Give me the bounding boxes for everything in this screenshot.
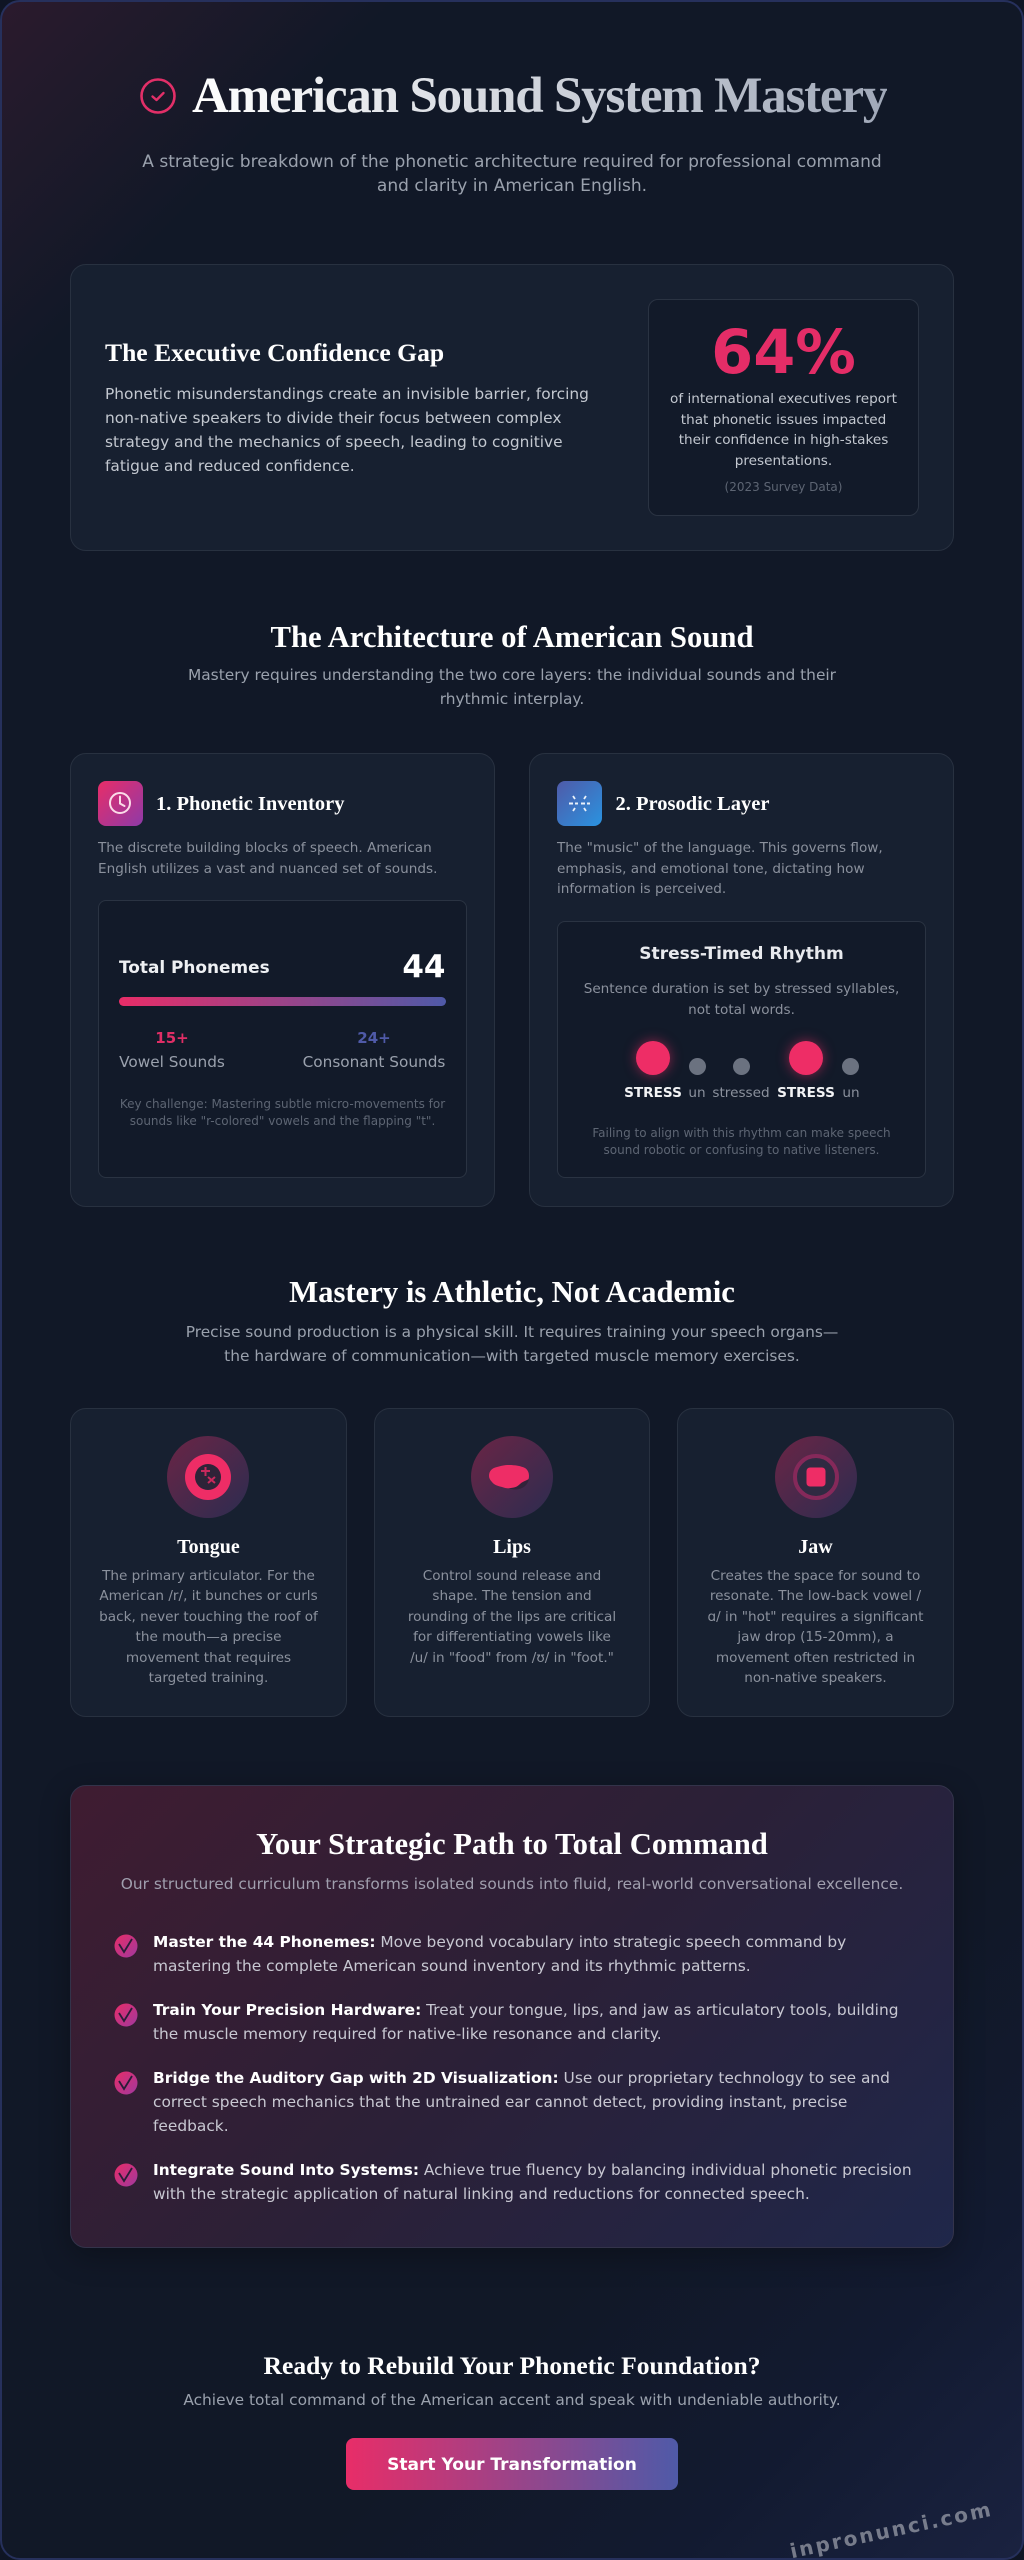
text block: key challenge: Key challenge: Mastering subtle micro-movements for bbox=[120, 1096, 445, 1110]
label: vowel sounds: Vowel Sounds bbox=[119, 1053, 225, 1071]
text: train hardware: Train Your Precision Hardware: Treat your tongue, lips, and jaw as articulatory tools, building bbox=[153, 2001, 898, 2019]
text block: lips description: Control sound release and bbox=[423, 1568, 601, 1584]
label: total phonemes: Total Phonemes bbox=[119, 957, 270, 977]
title icon: check circle bbox=[140, 78, 176, 114]
list item: integrate sound bbox=[114, 2161, 912, 2203]
text block: lips description: shape. The tension and bbox=[432, 1588, 592, 1604]
heading: jaw: Jaw bbox=[798, 1536, 833, 1558]
title: American Sound System Mastery bbox=[192, 67, 887, 124]
label: STRESS 2: STRESS bbox=[777, 1085, 835, 1101]
icon: tongue bbox=[167, 1436, 249, 1518]
text block: jaw description: jaw drop (15-20mm), a bbox=[737, 1629, 894, 1645]
text block: prosodic description bbox=[556, 840, 883, 897]
heading: architecture: The Architecture of American Sound bbox=[270, 620, 754, 654]
text block: rhythm description: Sentence duration is set by stressed syllables, bbox=[584, 981, 899, 997]
icon: check bbox=[114, 2004, 138, 2026]
dot: stress 2 bbox=[789, 1041, 823, 1075]
text: integrate sound bbox=[153, 2161, 912, 2203]
heading: prosodic layer: 2. Prosodic Layer bbox=[616, 793, 769, 815]
heading: mastery is athletic: Mastery is Athletic, Not Academic bbox=[289, 1275, 735, 1309]
text block: prosodic description: information is perceived. bbox=[557, 881, 726, 897]
stat description: their confidence in high-stakes bbox=[679, 432, 888, 448]
text block: mastery subtitle bbox=[186, 1323, 838, 1365]
text block: rhythm warning: Failing to align with this rhythm can make speech bbox=[592, 1126, 891, 1140]
label: consonant sounds: Consonant Sounds bbox=[303, 1053, 445, 1071]
label: STRESS 1: STRESS bbox=[624, 1085, 682, 1101]
text block: path subtitle: Our structured curriculum transforms isolated sounds into fluid, real-world conversational excellence. bbox=[121, 1875, 903, 1893]
text: auditory gap bbox=[153, 2069, 890, 2135]
number: 15+: 15+ bbox=[155, 1029, 189, 1047]
text: integrate sound: Integrate Sound Into Systems: Achieve true fluency by balancing individual phonetic precision bbox=[153, 2161, 912, 2179]
stat description: of international executives report bbox=[670, 391, 897, 407]
text block: jaw description: non-native speakers. bbox=[744, 1670, 887, 1686]
text block: architecture subtitle: Mastery requires understanding the two core layers: the individual sounds and their bbox=[188, 666, 836, 684]
icon: check bbox=[114, 2072, 138, 2094]
text: train hardware bbox=[153, 2001, 898, 2043]
panel: phonetic inventory bbox=[70, 753, 495, 1207]
heading: call to action: Ready to Rebuild Your Phonetic Foundation? bbox=[263, 2351, 760, 2380]
text block: gap description: non-native speakers to divide their focus between complex bbox=[105, 409, 562, 427]
text block: gap description: fatigue and reduced confidence. bbox=[105, 457, 355, 475]
subtitle: A strategic breakdown of the phonetic architecture required for professional command bbox=[142, 152, 882, 172]
panel: executive confidence gap bbox=[70, 264, 954, 551]
text: auditory gap: feedback. bbox=[153, 2117, 229, 2135]
stat: vowel sounds bbox=[119, 1029, 225, 1071]
button: start your transformation bbox=[346, 2438, 678, 2490]
panel: jaw bbox=[677, 1408, 954, 1717]
text block: mastery subtitle: the hardware of communication—with targeted muscle memory exercises. bbox=[224, 1347, 800, 1365]
heading: tongue: Tongue bbox=[177, 1536, 240, 1558]
text block: rhythm warning bbox=[592, 1126, 891, 1156]
list item: master phonemes bbox=[114, 1933, 846, 1975]
text block: tongue description bbox=[99, 1568, 318, 1686]
text block: jaw description: Creates the space for sound to bbox=[711, 1568, 920, 1584]
text block: rhythm description: not total words. bbox=[688, 1002, 795, 1018]
heading: lips: Lips bbox=[493, 1536, 531, 1558]
text block: rhythm warning: sound robotic or confusing to native listeners. bbox=[604, 1142, 879, 1156]
diagram: stress-timed rhythm bbox=[557, 921, 926, 1178]
text block: tongue description: movement that requires bbox=[126, 1650, 291, 1666]
text: integrate sound: with the strategic application of natural linking and reductions for connected speech. bbox=[153, 2185, 810, 2203]
text block: architecture subtitle: rhythmic interplay. bbox=[440, 690, 584, 708]
text block: jaw description: movement often restricted in bbox=[716, 1650, 915, 1666]
number: 44: 44 bbox=[402, 949, 446, 985]
text block: inventory description: English utilizes a vast and nuanced set of sounds. bbox=[98, 860, 437, 876]
dot: stressed bbox=[732, 1058, 750, 1074]
text: master phonemes: Master the 44 Phonemes: Move beyond vocabulary into strategic speech command by bbox=[153, 1933, 846, 1951]
heading: executive confidence gap: The Executive Confidence Gap bbox=[105, 338, 444, 367]
text block: gap description: Phonetic misunderstandings create an invisible barrier, forcing bbox=[105, 385, 589, 403]
text block: tongue description: targeted training. bbox=[149, 1670, 268, 1686]
label: stressed: stressed bbox=[712, 1085, 770, 1101]
text block: key challenge bbox=[120, 1096, 446, 1128]
panel: tongue bbox=[70, 1408, 347, 1717]
text block: prosodic description: emphasis, and emotional tone, dictating how bbox=[557, 860, 865, 876]
stat box: 64% bbox=[648, 299, 919, 516]
text block: inventory description: The discrete building blocks of speech. American bbox=[98, 840, 432, 856]
text: auditory gap: correct speech mechanics that the untrained ear cannot detect, providing instant, precise bbox=[153, 2093, 847, 2111]
stat number: 64% bbox=[711, 318, 856, 388]
text block: inventory description bbox=[98, 840, 437, 876]
icon: clock bbox=[98, 781, 143, 826]
label: un 2: un bbox=[842, 1085, 860, 1101]
heading: phonetic inventory: 1. Phonetic Inventory bbox=[156, 793, 344, 815]
text: master phonemes bbox=[153, 1933, 846, 1975]
text block: prosodic description: The "music" of the language. This governs flow, bbox=[557, 840, 883, 856]
text block: key challenge: sounds like "r-colored" vowels and the flapping "t". bbox=[130, 1114, 435, 1128]
text block: rhythm description bbox=[584, 981, 899, 1018]
text: auditory gap: Bridge the Auditory Gap with 2D Visualization: Use our proprietary technology to see and bbox=[153, 2069, 890, 2087]
icon: lips bbox=[471, 1436, 553, 1518]
subtitle bbox=[142, 152, 882, 196]
text block: lips description: rounding of the lips are critical bbox=[408, 1609, 616, 1625]
text block: tongue description: The primary articulator. For the bbox=[102, 1568, 315, 1584]
list item: train hardware bbox=[114, 2001, 898, 2043]
label: un 1: un bbox=[688, 1085, 706, 1101]
text: train hardware: the muscle memory required for native-like resonance and clarity. bbox=[153, 2025, 662, 2043]
text block: tongue description: American /r/, it bunches or curls bbox=[99, 1588, 318, 1604]
text block: lips description bbox=[408, 1568, 616, 1666]
text: master phonemes: mastering the complete American sound inventory and its rhythmic patterns. bbox=[153, 1957, 751, 1975]
text block: jaw description bbox=[708, 1568, 924, 1686]
heading: stress-timed rhythm: Stress-Timed Rhythm bbox=[639, 944, 844, 964]
stat description: presentations. bbox=[735, 452, 832, 468]
dot: stress 1 bbox=[636, 1041, 670, 1075]
panel: prosodic layer bbox=[529, 753, 954, 1207]
subtitle: and clarity in American English. bbox=[377, 176, 647, 196]
chart: total phonemes bbox=[98, 900, 467, 1178]
dot: un bbox=[688, 1058, 706, 1074]
text block: lips description: /u/ in "food" from /ʊ/ in "foot." bbox=[410, 1650, 614, 1666]
icon: jaw bbox=[775, 1436, 857, 1518]
stat source: (2023 Survey Data) bbox=[725, 480, 842, 494]
list item: auditory gap bbox=[114, 2069, 890, 2135]
text block: architecture subtitle bbox=[188, 666, 836, 708]
text block: tongue description: the mouth—a precise bbox=[136, 1629, 281, 1645]
number: 24+: 24+ bbox=[357, 1029, 391, 1047]
button: start your transformation: Start Your Transformation bbox=[387, 2455, 637, 2475]
dot: un 2 bbox=[842, 1058, 859, 1074]
text block: gap description: strategy and the mechanics of speech, leading to cognitive bbox=[105, 433, 563, 451]
stat description bbox=[670, 391, 897, 468]
icon: sparkle waves bbox=[557, 781, 602, 826]
stat: consonant sounds bbox=[303, 1029, 445, 1071]
progress bar bbox=[119, 997, 446, 1006]
panel: lips bbox=[374, 1408, 650, 1717]
text block: mastery subtitle: Precise sound production is a physical skill. It requires training your speech organs— bbox=[186, 1323, 838, 1341]
icon: check bbox=[114, 2164, 138, 2186]
icon: check bbox=[114, 1934, 138, 1958]
text block: jaw description: ɑ/ in "hot" requires a significant bbox=[708, 1609, 923, 1625]
text block: lips description: for differentiating vowels like bbox=[413, 1629, 611, 1645]
text block: gap description bbox=[105, 385, 589, 475]
text block: call to action subtitle: Achieve total command of the American accent and speak with undeniable authority. bbox=[183, 2391, 841, 2409]
text block: jaw description: resonate. The low-back vowel / bbox=[710, 1588, 921, 1604]
stat description: that phonetic issues impacted bbox=[681, 412, 886, 428]
text block: tongue description: back, never touching the roof of bbox=[99, 1609, 318, 1625]
panel: strategic path bbox=[70, 1785, 954, 2248]
heading: strategic path: Your Strategic Path to Total Command bbox=[256, 1827, 768, 1861]
